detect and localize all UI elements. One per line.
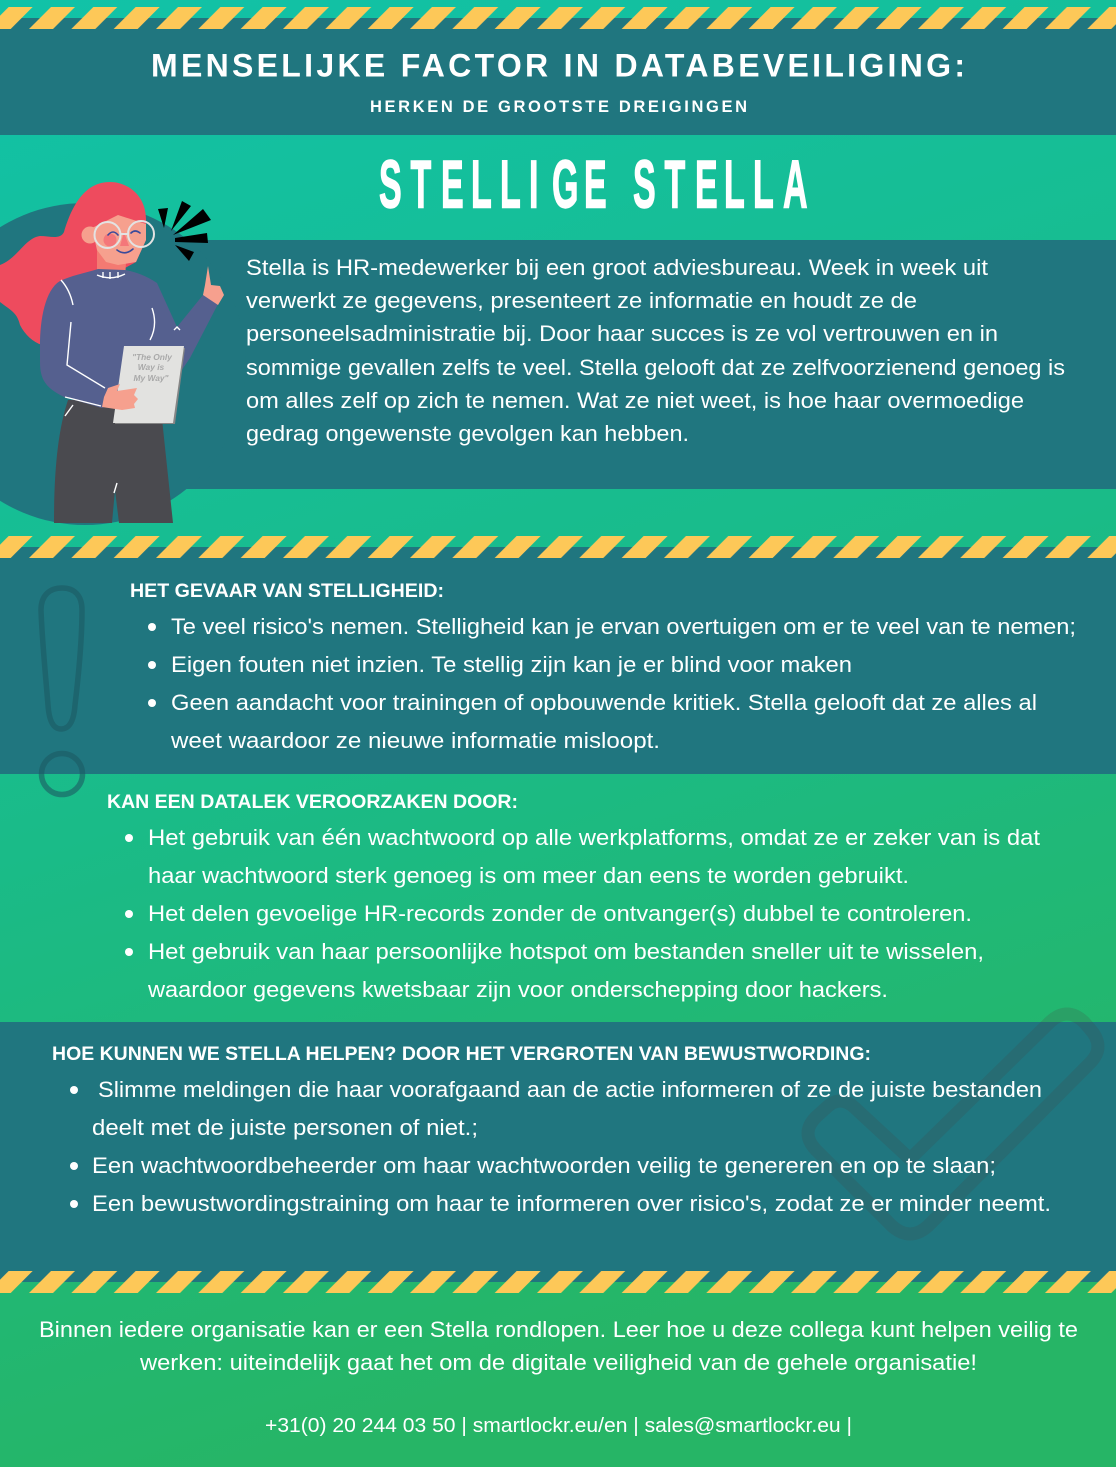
causes list: Het delen gevoelige HR-records zonder de ontvanger(s) dubbel te controleren. xyxy=(148,901,972,926)
heading: Stellige Stella: STELLIGE STELLA xyxy=(379,147,808,223)
backdrop circle xyxy=(0,203,246,525)
section: data leak causes xyxy=(107,791,1041,1002)
bullets xyxy=(148,623,156,707)
contact line: +31(0) 20 244 03 50 | smartlockr.eu/en | sales@smartlockr.eu | xyxy=(265,1414,852,1437)
ear xyxy=(82,226,98,244)
danger list: Eigen fouten niet inzien. Te stellig zijn kan je er blind voor maken xyxy=(171,652,852,677)
raised hand xyxy=(203,266,224,305)
heading: solutions: HOE KUNNEN WE STELLA HELPEN? DOOR HET VERGROTEN VAN BEWUSTWORDING: xyxy=(52,1043,871,1065)
intro text block: sommige gevallen zelfs te veel. Stella gelooft dat ze zelfvoorzienend genoeg is xyxy=(246,355,1065,380)
section: dangers xyxy=(130,580,1076,753)
book text: "The Only xyxy=(132,352,172,362)
causes list: Het gebruik van één wachtwoord op alle werkplatforms, omdat ze er zeker van is dat xyxy=(148,825,1041,850)
cheek xyxy=(104,234,116,246)
heading: dangers: HET GEVAAR VAN STELLIGHEID: xyxy=(130,580,444,602)
closing text: werken: uiteindelijk gaat het om de digitale veiligheid van de gehele organisatie! xyxy=(139,1350,977,1375)
book text: My Way" xyxy=(133,373,170,383)
intro text block: verwerkt ze gegevens, presenteert ze informatie en houdt ze de xyxy=(246,288,917,313)
solutions list: deelt met de juiste personen of niet.; xyxy=(92,1115,478,1140)
holding hand xyxy=(102,384,138,410)
intro text block: personeelsadministratie bij. Door haar succes is ze vol vertrouwen en in xyxy=(246,321,998,346)
book text: Way is xyxy=(138,362,165,372)
sweater xyxy=(40,269,218,408)
intro text block xyxy=(246,255,1065,446)
solutions list: Een wachtwoordbeheerder om haar wachtwoorden veilig te genereren en op te slaan; xyxy=(92,1153,996,1178)
panel: header band xyxy=(0,18,1116,135)
closing text: Binnen iedere organisatie kan er een Stella rondlopen. Leer hoe u deze collega kunt helpen veilig te xyxy=(39,1317,1078,1342)
danger list: Geen aandacht voor trainingen of opbouwende kritiek. Stella gelooft dat ze alles al xyxy=(171,690,1037,715)
closing text xyxy=(39,1317,1078,1375)
solutions list: Een bewustwordingstraining om haar te informeren over risico's, zodat ze er minder neemt. xyxy=(92,1191,1051,1216)
danger list xyxy=(170,614,1076,753)
pants xyxy=(54,400,173,523)
causes list xyxy=(147,825,1041,1002)
solutions list xyxy=(92,1077,1051,1216)
title: MENSELIJKE FACTOR IN DATABEVEILIGING: xyxy=(151,48,965,84)
heading: causes: KAN EEN DATALEK VEROORZAKEN DOOR: xyxy=(107,791,518,813)
face xyxy=(92,215,146,265)
icon: exclamation mark xyxy=(41,588,82,794)
sweater lines xyxy=(61,280,180,493)
section: solutions xyxy=(52,1043,1051,1216)
neck xyxy=(97,248,126,280)
eyes and mouth xyxy=(108,231,140,253)
hazard stripe: top xyxy=(0,7,1116,29)
solutions list: Slimme meldingen die haar voorafgaand aan de actie informeren of ze de juiste bestanden xyxy=(98,1077,1042,1102)
causes list: Het gebruik van haar persoonlijke hotspot om bestanden sneller uit te wisselen, xyxy=(148,939,984,964)
danger list: Te veel risico's nemen. Stelligheid kan je ervan overtuigen om er te veel van te nemen; xyxy=(171,614,1076,639)
hazard stripe: middle xyxy=(0,536,1116,558)
glasses xyxy=(94,221,154,248)
hair xyxy=(0,182,146,345)
panel: dangers of overconfidence xyxy=(0,547,1116,774)
danger list: weet waardoor ze nieuwe informatie misloopt. xyxy=(170,728,660,753)
icon: check mark xyxy=(808,1014,1098,1234)
book xyxy=(113,346,185,424)
bullets xyxy=(70,1086,78,1208)
panel: Stella intro band xyxy=(0,240,1116,489)
intro text block: Stella is HR-medewerker bij een groot adviesbureau. Week in week uit xyxy=(246,255,989,280)
subtitle: HERKEN DE GROOTSTE DREIGINGEN xyxy=(370,98,747,116)
panel: how to help xyxy=(0,1022,1116,1282)
book text xyxy=(132,352,172,383)
causes list: waardoor gegevens kwetsbaar zijn voor onderschepping door hackers. xyxy=(147,977,888,1002)
hazard stripe: bottom xyxy=(0,1271,1116,1293)
burst lines xyxy=(158,201,211,261)
intro text block: om alles zelf op zich te nemen. Wat ze niet weet, is hoe haar overmoedige xyxy=(246,388,1024,413)
bullets xyxy=(125,834,133,956)
collar xyxy=(97,272,125,279)
causes list: haar wachtwoord sterk genoeg is om meer dan eens te worden gebruikt. xyxy=(148,863,909,888)
intro text block: gedrag ongewenste gevolgen kan hebben. xyxy=(246,421,689,446)
nose xyxy=(120,232,129,246)
illustration: Stella character xyxy=(0,182,224,523)
